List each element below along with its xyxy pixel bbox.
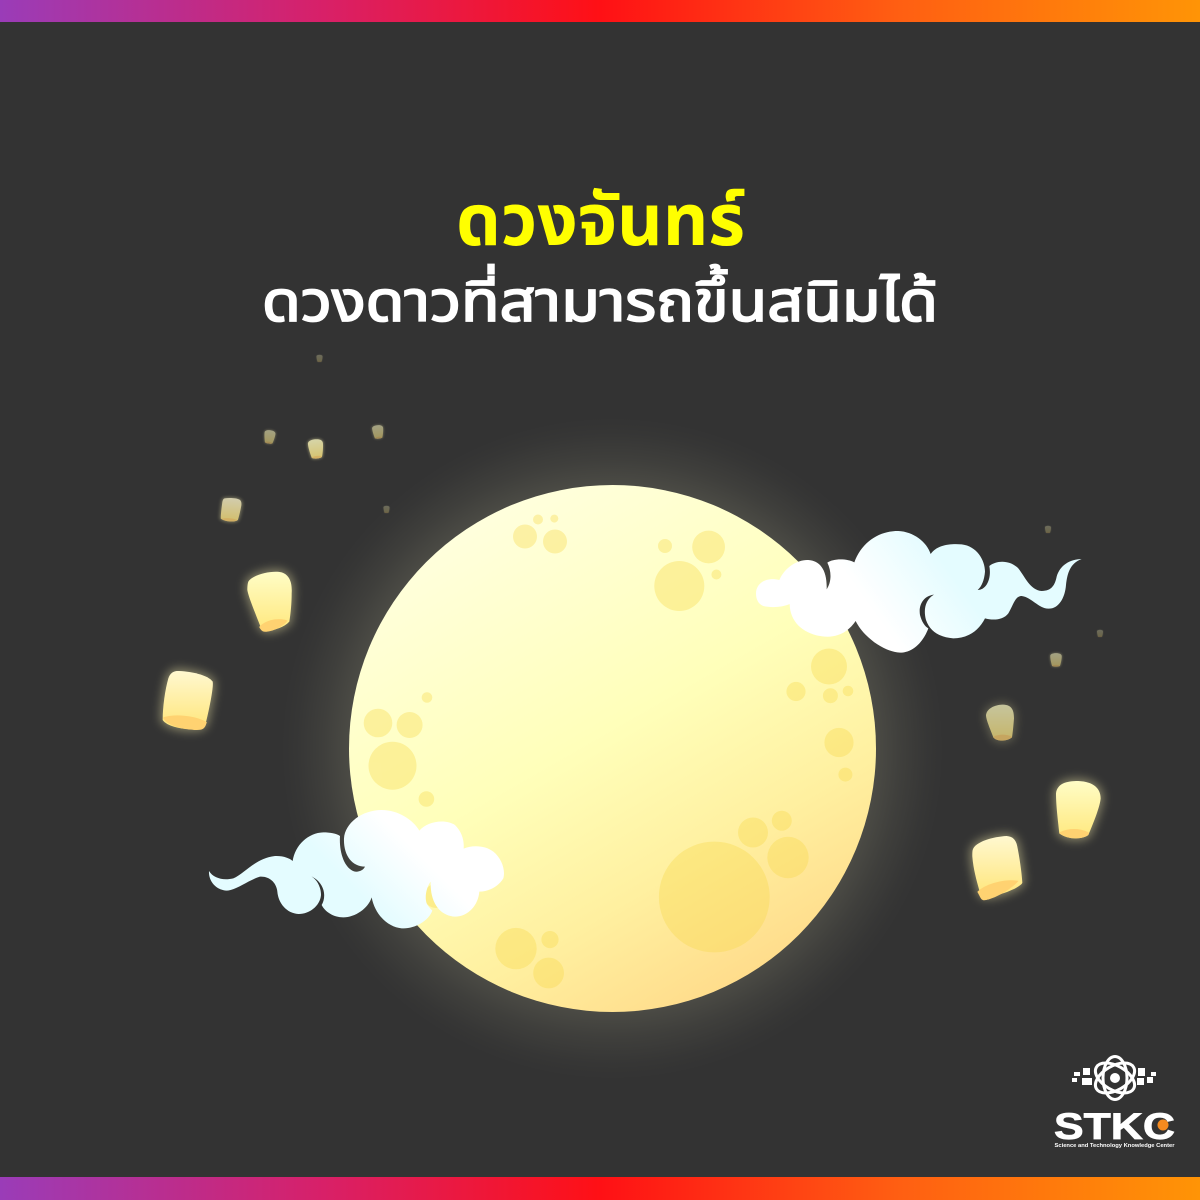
logo pixels xyxy=(1072,1068,1156,1085)
lantern xyxy=(219,497,242,526)
cloud: upper right xyxy=(756,531,1082,653)
lanterns: right group xyxy=(971,526,1103,912)
moon glow xyxy=(280,416,944,1080)
lantern xyxy=(1045,526,1051,534)
lantern xyxy=(308,439,325,462)
title xyxy=(262,181,938,333)
lantern xyxy=(1050,653,1062,669)
heading: moon: ดวงจันทร์ xyxy=(456,181,745,261)
lantern xyxy=(1055,781,1101,848)
logo wordmark: STKC xyxy=(1054,1106,1175,1147)
top gradient bar xyxy=(0,0,1200,22)
lanterns: left group xyxy=(155,355,390,737)
lantern xyxy=(316,355,322,363)
moon xyxy=(349,485,876,1012)
lantern xyxy=(263,429,276,446)
lantern xyxy=(986,705,1015,747)
lantern xyxy=(1097,630,1103,638)
lantern xyxy=(383,506,390,514)
lantern xyxy=(247,572,296,643)
logo tagline: Science and Technology Knowledge Center xyxy=(1054,1143,1175,1149)
bottom gradient bar xyxy=(0,1177,1200,1200)
logo orange dot xyxy=(1158,1120,1168,1130)
lantern xyxy=(971,836,1032,912)
cloud: lower left xyxy=(209,810,504,928)
subheading: ดวงดาวที่สามารถขึ้นสนิมได้ xyxy=(262,264,938,333)
logo atom icon xyxy=(1090,1056,1140,1100)
lantern xyxy=(155,671,213,737)
lantern xyxy=(372,425,384,441)
moon craters xyxy=(364,514,854,988)
logo: STKC xyxy=(1054,1056,1175,1149)
